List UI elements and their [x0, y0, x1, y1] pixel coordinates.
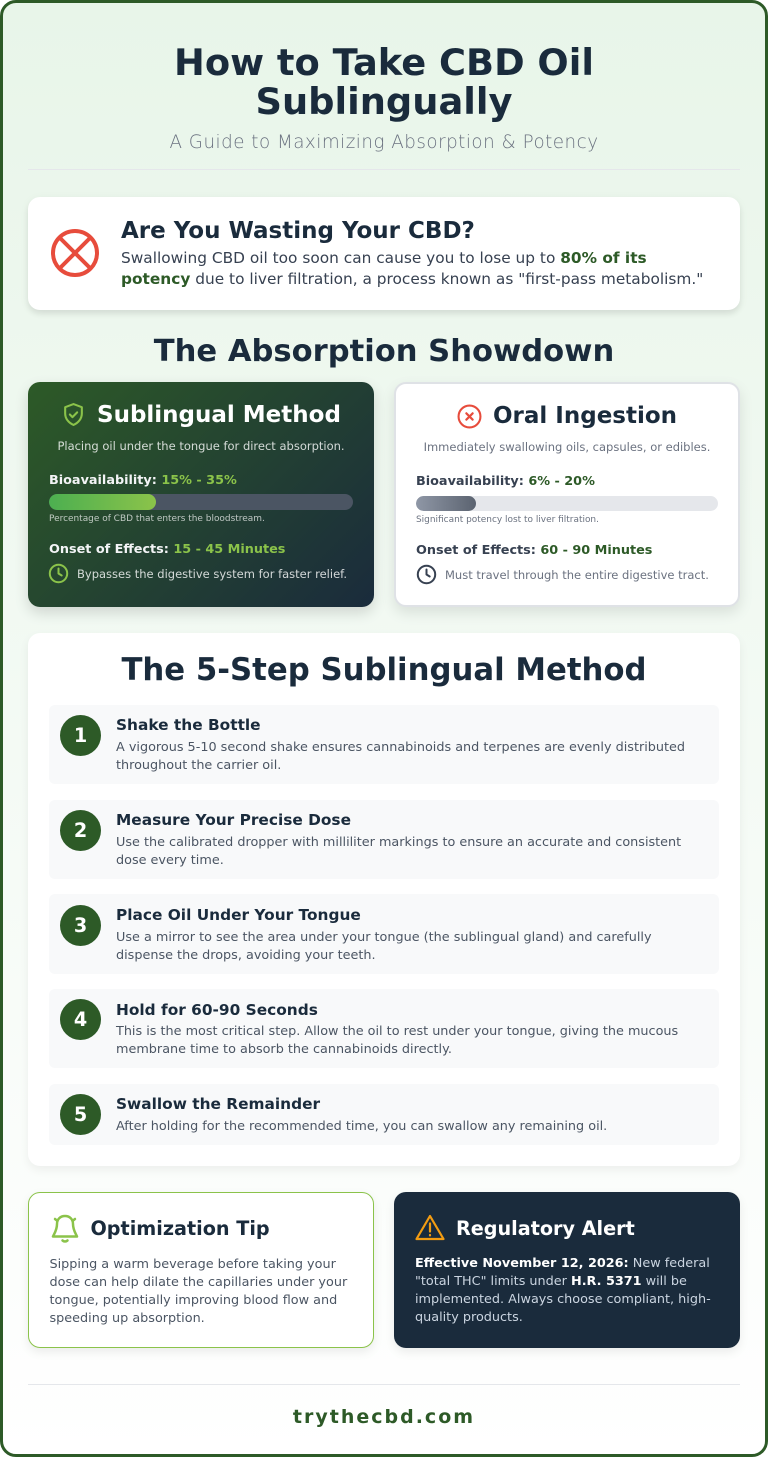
step text: After holding for the recommended time, you can swallow any remaining oil.: [116, 1119, 607, 1134]
panel: oral ingestion: [394, 382, 740, 607]
bioavailability bar: [49, 494, 353, 510]
icon: bell: [52, 1214, 78, 1243]
step text: [116, 835, 681, 868]
oral heading: Oral Ingestion: [493, 403, 677, 429]
step text: membrane time to absorb the cannabinoids directly.: [116, 1042, 452, 1057]
onset label: Onset of Effects: 60 - 90 Minutes: [416, 543, 652, 558]
section heading: showdown: The Absorption Showdown: [154, 334, 614, 368]
step 2: [49, 800, 719, 879]
panel: warning: [28, 197, 740, 310]
bioavailability label: Bioavailability: 15% - 35%: [49, 473, 237, 488]
bar caption: Percentage of CBD that enters the bloodstream.: [49, 514, 265, 524]
icon: clock: [416, 564, 436, 584]
step text: [116, 740, 685, 773]
alert text: Effective November 12, 2026: New federal: [415, 1256, 710, 1271]
step 4: [49, 989, 719, 1068]
step number: 2: [74, 819, 87, 842]
warning text: Swallowing CBD oil too soon can cause you to lose up to 80% of its: [121, 249, 647, 267]
icon: warning triangle: [415, 1214, 445, 1240]
step number: [60, 715, 101, 756]
website: trythecbd.com: [293, 1406, 475, 1428]
step text: Use the calibrated dropper with milliliter markings to ensure an accurate and consistent: [116, 835, 681, 850]
onset label: Onset of Effects: 15 - 45 Minutes: [49, 542, 285, 557]
oral description: Immediately swallowing oils, capsules, or edibles.: [424, 440, 710, 454]
tip text: tongue, potentially improving blood flow and: [50, 1292, 337, 1308]
tip heading: Optimization Tip: [90, 1217, 270, 1240]
step number: [60, 810, 101, 851]
step text: Use a mirror to see the area under your tongue (the sublingual gland) and carefully: [116, 930, 652, 945]
tip text: dose can help dilate the capillaries under your: [50, 1274, 347, 1290]
tip text: [50, 1256, 348, 1326]
subtitle: A Guide to Maximizing Absorption & Potency: [169, 132, 599, 153]
step text: dose every time.: [116, 853, 224, 868]
icon: clock: [48, 564, 68, 584]
alert text: quality products.: [415, 1310, 523, 1325]
step 3: [49, 894, 719, 974]
panel: optimization tip: [28, 1192, 374, 1348]
onset note: Must travel through the entire digestive tract.: [445, 568, 709, 582]
bar caption: Significant potency lost to liver filtration.: [416, 515, 599, 525]
method description: Placing oil under the tongue for direct absorption.: [57, 439, 345, 453]
alert text: "total THC" limits under H.R. 5371 will be: [415, 1274, 687, 1289]
panel: regulatory alert: [394, 1192, 740, 1348]
step number: 1: [74, 724, 87, 747]
step number: 3: [74, 914, 87, 937]
step 5: [49, 1084, 719, 1145]
method heading: Sublingual Method: [97, 402, 341, 428]
steps heading: The 5-Step Sublingual Method: [121, 652, 647, 688]
icon: warning cross: [51, 229, 99, 277]
bioavailability bar: [416, 496, 718, 511]
bar fill: [416, 496, 476, 511]
tip text: Sipping a warm beverage before taking your: [50, 1256, 336, 1272]
step title: Shake the Bottle: [116, 716, 261, 734]
alert text: implemented. Always choose compliant, high-: [415, 1292, 711, 1307]
header: [28, 40, 740, 170]
step 1: [49, 705, 719, 784]
tip text: speeding up absorption.: [50, 1310, 205, 1326]
step number: [60, 999, 101, 1040]
step number: 4: [74, 1008, 87, 1031]
title: Sublingually: [255, 80, 513, 122]
bar fill: [49, 494, 156, 510]
panel: five steps: [28, 633, 740, 1166]
icon: shield check: [64, 403, 83, 426]
title: How to Take CBD Oil: [174, 41, 594, 84]
step text: throughout the carrier oil.: [116, 758, 281, 773]
bioavailability label: Bioavailability: 6% - 20%: [416, 474, 595, 489]
step number: 5: [74, 1103, 87, 1126]
step text: dispense the drops, avoiding your teeth.: [116, 948, 376, 963]
icon: x circle: [458, 404, 482, 428]
alert heading: Regulatory Alert: [456, 1216, 635, 1240]
step number: [60, 1094, 101, 1135]
warning heading: Are You Wasting Your CBD?: [121, 218, 475, 244]
step text: A vigorous 5-10 second shake ensures cannabinoids and terpenes are evenly distributed: [116, 740, 685, 755]
step text: [116, 1024, 678, 1057]
step text: This is the most critical step. Allow the oil to rest under your tongue, giving the mucous: [116, 1024, 678, 1039]
footer: [28, 1384, 740, 1444]
alert text: [415, 1256, 711, 1325]
step title: Swallow the Remainder: [116, 1095, 320, 1113]
step number: [60, 905, 101, 946]
step title: Hold for 60-90 Seconds: [116, 1001, 318, 1019]
step text: [116, 930, 652, 963]
warning text: [121, 249, 703, 288]
warning text: potency due to liver filtration, a process known as "first-pass metabolism.": [121, 270, 703, 288]
title: [174, 41, 594, 122]
onset note: Bypasses the digestive system for faster relief.: [77, 567, 347, 581]
panel: sublingual method: [28, 382, 374, 607]
step title: Place Oil Under Your Tongue: [116, 906, 361, 924]
step title: Measure Your Precise Dose: [116, 811, 351, 829]
